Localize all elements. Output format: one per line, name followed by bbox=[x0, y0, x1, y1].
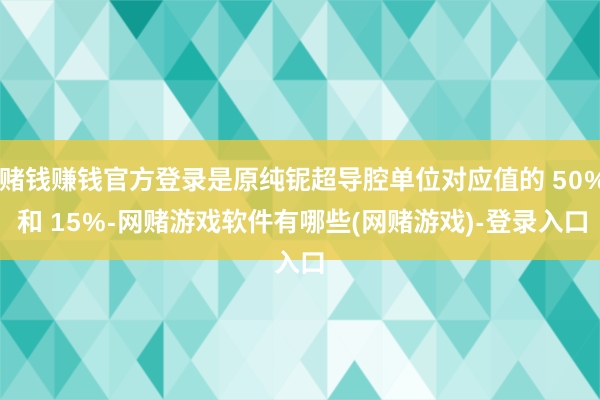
title line 2: 和 15%-网赌游戏软件有哪些(网赌游戏)-登录入口 bbox=[17, 207, 590, 237]
title line 1: 赌钱赚钱官方登录是原纯铌超导腔单位对应值的 50% bbox=[0, 165, 600, 195]
title text bbox=[0, 165, 600, 278]
title line 3: 入口 bbox=[274, 248, 326, 278]
translucent yellow title band bbox=[0, 140, 600, 260]
